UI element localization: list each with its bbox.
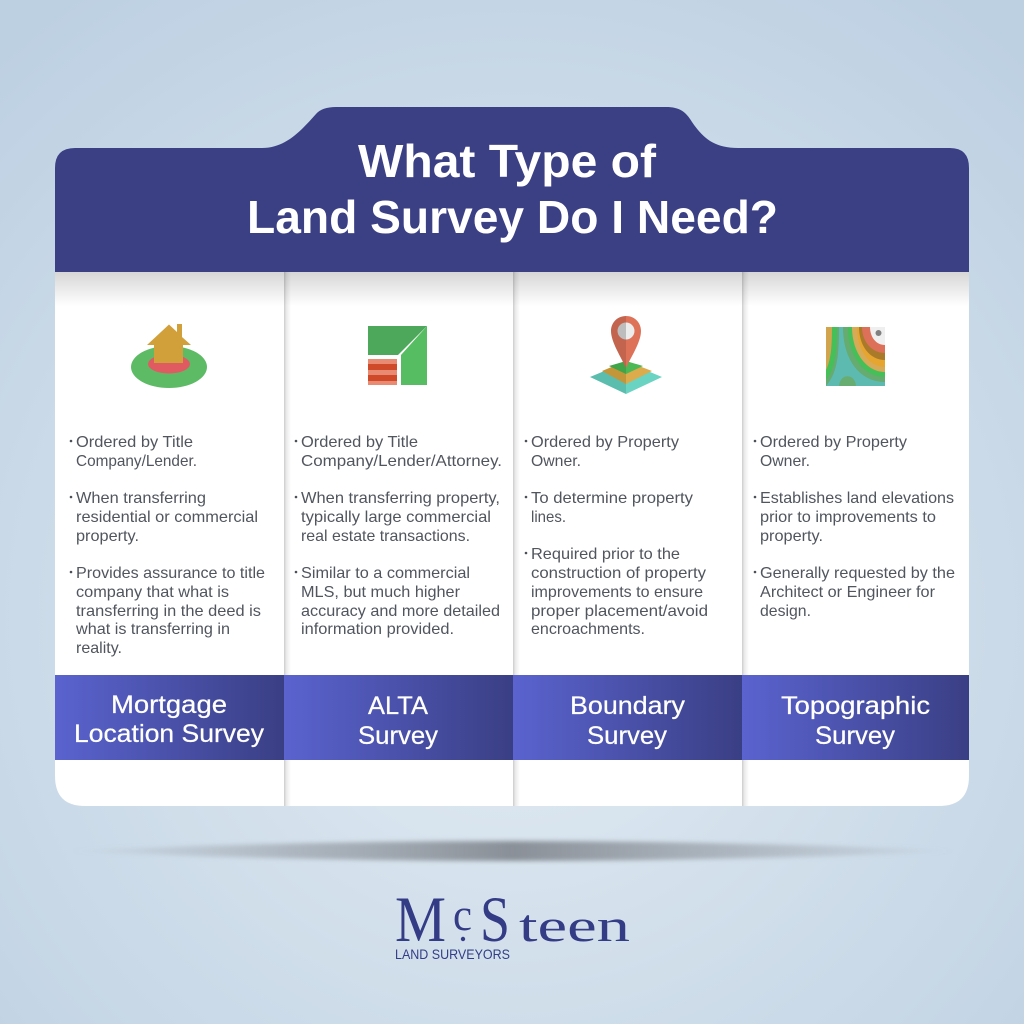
column 1 text: company that what is xyxy=(76,584,229,601)
logo: McSteen Land Surveyors: M xyxy=(395,884,446,956)
logo: McSteen Land Surveyors: teen xyxy=(519,900,630,951)
column 2 text xyxy=(295,434,502,638)
column 3 text: improvements to ensure xyxy=(531,584,703,601)
column 2 text: Similar to a commercial xyxy=(301,565,470,582)
column 1 text: transferring in the deed is xyxy=(76,603,261,620)
column 3 text: lines. xyxy=(531,509,566,526)
column 3 text xyxy=(525,434,708,638)
column 3 text: construction of property xyxy=(531,565,706,582)
column 1 text: residential or commercial xyxy=(76,509,258,526)
column 3 text: encroachments. xyxy=(531,621,645,638)
label band: Topographic Survey: Topographic xyxy=(781,692,930,720)
column 1 text: Company/Lender. xyxy=(76,453,197,470)
label band: Mortgage Location Survey: Location Survey xyxy=(74,720,265,748)
column 3 text: To determine property xyxy=(531,490,693,507)
column 2 text: Company/Lender/Attorney. xyxy=(301,453,502,470)
label band: Boundary Survey xyxy=(513,675,742,760)
logo: McSteen Land Surveyors: c xyxy=(453,889,472,940)
column 3 text: Ordered by Property xyxy=(531,434,679,451)
label band: Mortgage Location Survey: Mortgage xyxy=(111,691,227,719)
column 2 text: real estate transactions. xyxy=(301,528,470,545)
column 2 text: MLS, but much higher xyxy=(301,584,461,601)
column 4 text: Establishes land elevations xyxy=(760,490,954,507)
column 3 text: proper placement/avoid xyxy=(531,603,708,620)
label band: Boundary Survey: Boundary xyxy=(570,692,686,720)
label band: Topographic Survey xyxy=(742,675,969,760)
logo: McSteen Land Surveyors xyxy=(395,884,630,962)
header banner xyxy=(55,107,969,272)
column 2 text: When transferring property, xyxy=(301,490,500,507)
column 4 text xyxy=(754,434,955,620)
icon: topographic map xyxy=(826,327,885,386)
column 4 text: Ordered by Property xyxy=(760,434,907,451)
column 2 text: Ordered by Title xyxy=(301,434,418,451)
title: What Type of xyxy=(358,135,657,187)
column 2 text: information provided. xyxy=(301,621,454,638)
column 1 text xyxy=(70,434,265,657)
label band: ALTA Survey xyxy=(284,675,513,760)
column 4 text: Owner. xyxy=(760,453,810,470)
logo: McSteen Land Surveyors: S xyxy=(480,884,510,956)
column 1 text: When transferring xyxy=(76,490,206,507)
icon: house on green plot xyxy=(131,324,207,388)
column 2 text: typically large commercial xyxy=(301,509,491,526)
label band: ALTA Survey: Survey xyxy=(358,722,439,750)
column 1 text: Provides assurance to title xyxy=(76,565,265,582)
icon: ALTA parcel xyxy=(368,326,427,385)
label band: Topographic Survey: Survey xyxy=(815,722,896,750)
top shade under header xyxy=(55,272,969,306)
column 1 text: property. xyxy=(76,528,139,545)
column 4 text: Architect or Engineer for xyxy=(760,584,936,601)
column 1 text: what is transferring in xyxy=(75,621,230,638)
column 4 text: property. xyxy=(760,528,823,545)
column 1 text: Ordered by Title xyxy=(76,434,193,451)
label band: Mortgage Location Survey xyxy=(55,675,284,760)
card shadow on floor xyxy=(65,841,960,861)
title: Land Survey Do I Need? xyxy=(247,191,778,243)
icon: boundary pin on layered land xyxy=(590,316,662,394)
column 3 text: Required prior to the xyxy=(531,546,680,563)
title xyxy=(247,135,778,243)
panel: white card xyxy=(55,200,969,806)
column 2 text: accuracy and more detailed xyxy=(301,603,500,620)
column 3 text: Owner. xyxy=(531,453,581,470)
label band: Boundary Survey: Survey xyxy=(587,722,668,750)
label band: ALTA Survey: ALTA xyxy=(368,692,428,720)
column 4 text: design. xyxy=(760,603,811,620)
column 4 text: prior to improvements to xyxy=(760,509,936,526)
column 4 text: Generally requested by the xyxy=(760,565,955,582)
logo: McSteen Land Surveyors: LAND SURVEYORS xyxy=(395,946,510,962)
column 1 text: reality. xyxy=(76,640,122,657)
